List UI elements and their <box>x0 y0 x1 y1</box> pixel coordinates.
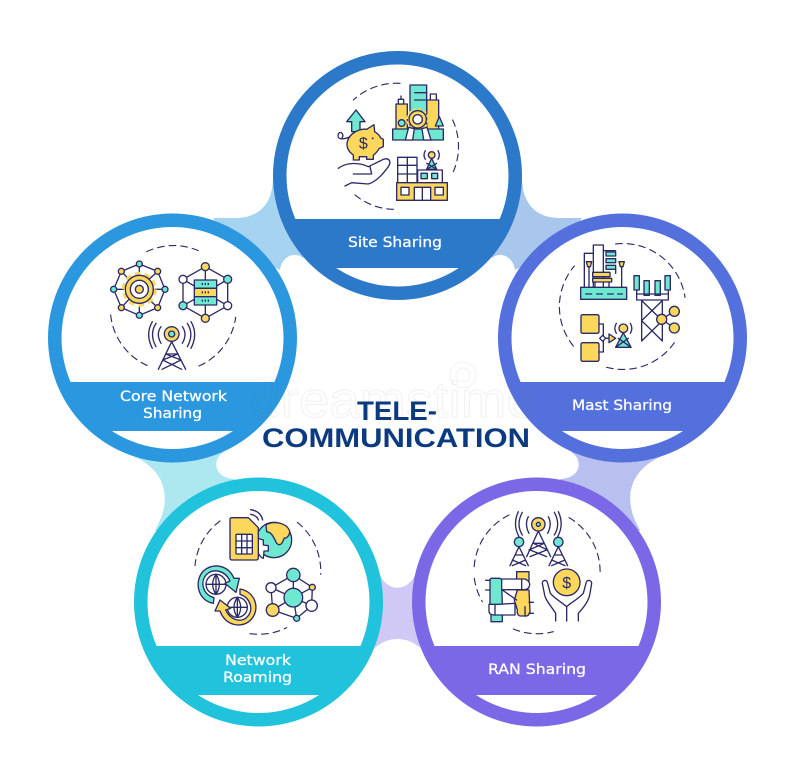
panel: core network sharing <box>48 214 297 462</box>
panel: network roaming <box>134 478 383 726</box>
title: COMMUNICATION <box>262 423 530 453</box>
label: mast sharing: Mast Sharing <box>572 398 672 414</box>
icon: network roaming <box>195 510 321 634</box>
label: network roaming <box>223 653 292 686</box>
panel: RAN sharing <box>412 478 661 726</box>
connector: site to mast <box>475 170 582 270</box>
connector: core network to roaming <box>131 440 235 540</box>
connector: mast to RAN <box>560 440 664 540</box>
label: network roaming: Roaming <box>223 670 292 686</box>
label: site sharing: Site Sharing <box>348 235 442 251</box>
icon: site sharing: $ <box>359 135 368 152</box>
label: core network sharing: Core Network <box>120 389 228 405</box>
label: core network sharing: Sharing <box>143 406 202 422</box>
panel: site sharing <box>273 51 522 300</box>
connector: site to core network <box>213 170 320 270</box>
panel: mast sharing <box>498 214 747 462</box>
watermark: dreamstime <box>250 372 537 428</box>
label: network roaming: Network <box>225 653 292 669</box>
icon: mast sharing <box>559 244 685 369</box>
connector: roaming to RAN <box>375 575 420 648</box>
icon: site sharing <box>338 83 459 209</box>
title <box>262 396 530 453</box>
label: RAN sharing: RAN Sharing <box>488 662 586 678</box>
icon: core network sharing <box>111 246 236 369</box>
title: TELE- <box>357 396 437 426</box>
label: core network sharing <box>120 389 228 422</box>
icon: RAN sharing <box>474 512 600 634</box>
icon: RAN sharing: $ <box>562 575 571 592</box>
